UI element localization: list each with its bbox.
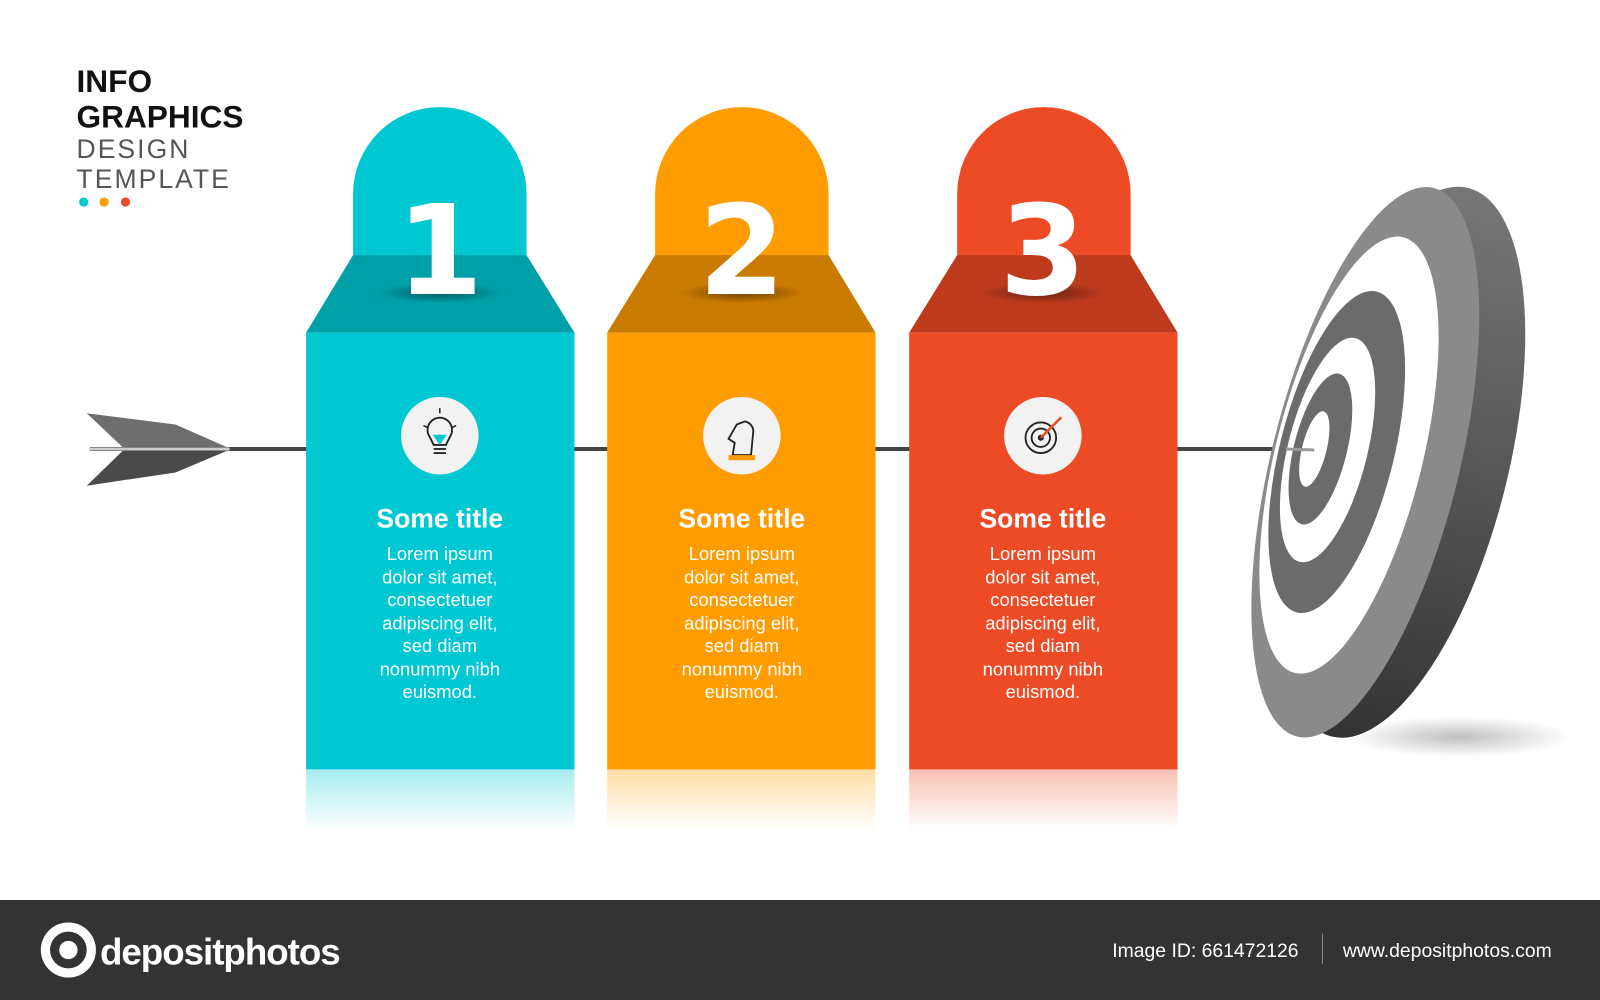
card 1 xyxy=(306,107,574,831)
text block 1: Some title xyxy=(376,504,503,534)
title block xyxy=(77,63,243,207)
text block 3: sed diam xyxy=(1006,635,1080,656)
text block 1: euismod. xyxy=(403,681,477,702)
text block 1: Lorem ipsum xyxy=(387,543,493,564)
text block 3: adipiscing elit, xyxy=(985,613,1101,634)
text block 3: Lorem ipsum xyxy=(990,543,1096,564)
footer image id: Image ID: 661472126 xyxy=(1112,940,1299,962)
text block 2: nonummy nibh xyxy=(682,659,802,680)
text block 1: dolor sit amet, xyxy=(382,567,497,588)
card 3 xyxy=(909,107,1178,831)
text block 3: euismod. xyxy=(1006,681,1080,702)
title block: GRAPHICS xyxy=(77,99,243,135)
footer logo xyxy=(41,922,340,978)
title block: DESIGN xyxy=(77,134,190,164)
text block 1: consectetuer xyxy=(387,589,492,610)
title block: TEMPLATE xyxy=(77,164,231,194)
icon: target xyxy=(1004,397,1082,474)
text block 3: consectetuer xyxy=(990,589,1095,610)
number 1: 1 xyxy=(396,179,483,324)
number 3: 3 xyxy=(1000,179,1086,324)
text block 1 xyxy=(376,504,503,702)
icon: light bulb xyxy=(401,397,479,474)
card 2 xyxy=(607,107,876,831)
icon: chess knight xyxy=(703,397,781,474)
text block 3: nonummy nibh xyxy=(983,659,1103,680)
number 2: 2 xyxy=(699,179,785,324)
text block 1: adipiscing elit, xyxy=(382,613,497,634)
footer bar xyxy=(0,900,1600,1000)
text block 2: adipiscing elit, xyxy=(684,613,800,634)
text block 3: Some title xyxy=(979,504,1106,534)
text block 2: dolor sit amet, xyxy=(684,567,799,588)
text block 1: nonummy nibh xyxy=(380,659,500,680)
text block 2: Some title xyxy=(678,504,805,534)
arrow: fletching and shaft xyxy=(87,413,1311,486)
target board xyxy=(1206,162,1573,763)
text block 2: sed diam xyxy=(705,635,779,656)
footer url: www.depositphotos.com xyxy=(1342,940,1552,962)
text block 3: dolor sit amet, xyxy=(985,567,1101,588)
text block 2 xyxy=(678,504,805,702)
text block 1: sed diam xyxy=(403,635,477,656)
title block: INFO xyxy=(77,63,152,99)
text block 2: euismod. xyxy=(705,681,779,702)
text block 2: consectetuer xyxy=(689,589,794,610)
text block 2: Lorem ipsum xyxy=(689,543,795,564)
footer logo: depositphotos xyxy=(100,931,340,972)
text block 3 xyxy=(979,504,1106,702)
